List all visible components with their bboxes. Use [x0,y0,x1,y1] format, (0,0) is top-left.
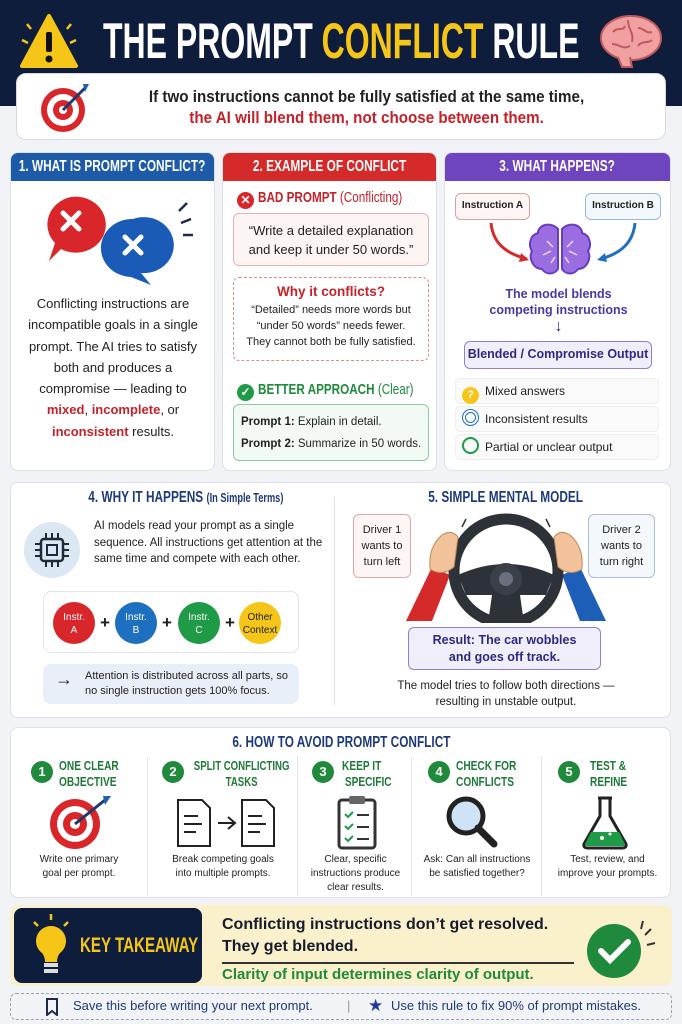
better approach label: BETTER APPROACH (Clear) [258,381,414,398]
step 3: clear results. [327,882,384,893]
attention note: Attention is distributed across all parts, so no single instruction gets 100% focus. [85,670,288,697]
text: model tries: resulting in unstable output. [436,696,576,708]
driver 2 box: turn right [600,556,643,568]
icon: speech bubbles [47,196,193,285]
subtitle text [149,88,585,127]
panel: 3 what happens [444,152,671,471]
text: why: AI models read your prompt as a single sequence. All instructions get attention at the same time and compete with each other. [94,520,322,565]
why it conflicts box: “under 50 words” needs fewer. [257,320,405,332]
step 4: Ask: Can all instructions [424,854,530,865]
icon: brain [600,15,662,68]
bad prompt quote box: “Write a detailed explanation [249,223,413,238]
driver 1 box: Driver 1 [363,524,401,536]
circles row: + [162,613,172,632]
step 2 [147,756,297,896]
footer dashed bar: | [347,998,350,1013]
result box: Result: The car wobbles [433,633,576,647]
header banner [0,0,682,106]
better approach label: ✓ [240,385,251,399]
step 1: OBJECTIVE [59,774,116,789]
step 2: into multiple prompts. [175,868,271,879]
instruction B box [585,193,661,220]
step 4: be satisfied together? [429,868,525,879]
heading 3: 3. WHAT HAPPENS? [500,158,615,175]
icon: check circle [587,920,656,978]
text: definition: Conflicting instructions are incompatible goals in a single prompt. The AI tries to satisfy both and produces a compromise — leading to mixed, incomplete, or inconsistent results. [28,296,198,439]
panel: 6 how to avoid [10,727,671,898]
icon: lightbulb [33,914,69,973]
panel: 4 and 5 [10,482,671,718]
subtitle text: If two instructions cannot be fully satisfied at the same time, [149,88,585,106]
instruction B box: Instruction B [592,200,654,211]
circles row [43,591,299,653]
circles row: Other [247,612,273,623]
circles row: Instr. [188,612,210,623]
list: outcomes: Mixed answers [485,384,565,398]
bad prompt quote box: and keep it under 50 words.” [249,242,413,257]
driver 2 box: Driver 2 [602,524,641,536]
step 3: SPECIFIC [345,774,392,789]
step 1 [31,758,119,879]
takeaway text: Conflicting instructions don’t get resolved. [222,916,548,933]
heading 6: 6. HOW TO AVOID PROMPT CONFLICT [232,734,451,751]
step 2: TASKS [226,774,258,789]
step 5: REFINE [590,774,627,789]
step 1: goal per prompt. [43,868,115,879]
heading 5: 5. SIMPLE MENTAL MODEL [429,489,583,506]
arrow down: ↓ [554,318,562,335]
text: model tries: The model tries to follow both directions — [397,680,615,692]
step 4 [411,756,541,896]
circles row: + [100,613,110,632]
icon: warning triangle [20,14,78,68]
why it conflicts box: “Detailed” needs more words but [251,304,411,316]
better prompt box: Prompt 2: Summarize in 50 words. [241,438,421,450]
heading 1: 1. WHAT IS PROMPT CONFLICT? [19,158,206,175]
output box [464,341,652,369]
attention note [43,664,299,704]
footer dashed bar [10,993,672,1020]
list: outcomes [455,378,659,460]
footer dashed bar: Use this rule to fix 90% of prompt mistakes. [391,998,641,1013]
subtitle card [16,73,666,140]
text: model blends [489,287,628,317]
step 5: improve your prompts. [558,868,657,879]
step 4: CHECK FOR [456,758,516,773]
step 1: 1 [38,764,46,779]
why it conflicts box [233,277,429,361]
step 5: Test, review, and [570,854,645,865]
heading 1 [0,153,364,181]
output box: Blended / Compromise Output [468,347,648,361]
icon: steering wheel with hands [406,514,606,623]
step 2: Break competing goals [172,854,274,865]
bad prompt quote box [233,213,429,266]
icon: brain with arrows [490,222,636,274]
icon: target [41,84,89,132]
text: model tries [397,680,615,708]
why it conflicts box: They cannot both be fully satisfied. [246,336,416,348]
key takeaway band: Clarity of input determines clarity of output. [222,966,534,983]
title: THE PROMPT CONFLICT RULE [103,13,579,69]
icon: bookmark [46,998,58,1016]
step 5 [541,756,672,896]
circles row: A [71,625,78,636]
driver 1 box: wants to [362,540,402,552]
step 3: Clear, specific [324,854,387,865]
panel: 1 what is prompt conflict [10,152,215,471]
list: outcomes: Partial or unclear output [485,440,612,454]
step 3 [297,756,412,896]
driver 2 box: wants to [601,540,642,552]
circles row: Instr. [125,612,147,623]
icon: chip [24,522,80,578]
step 3: 3 [319,764,327,779]
heading 4: 4. WHY IT HAPPENS (In Simple Terms) [88,489,284,506]
step 3: KEEP IT [342,758,381,773]
text: model blends: competing instructions [489,303,628,317]
bad prompt label: BAD PROMPT (Conflicting) [258,189,402,206]
circles row: C [195,625,203,636]
heading 3 [295,153,682,181]
subtitle text: the AI will blend them, not choose between them. [190,109,544,127]
takeaway text: They get blended. [222,938,358,955]
step 2: 2 [169,764,177,779]
step 1: Write one primary [40,854,118,865]
circles row: Instr. [63,612,85,623]
icon: star: ★ [368,996,383,1015]
better prompt box: Prompt 1: Explain in detail. [241,416,382,428]
footer dashed bar: Save this before writing your next prompt. [73,998,313,1013]
list: outcomes: Inconsistent results [485,412,588,426]
key takeaway label box: KEY TAKEAWAY [80,934,198,957]
result box: and goes off track. [449,650,560,664]
driver 2 box [588,514,655,578]
divider [334,497,335,705]
step 3: instructions produce [311,868,400,879]
why it conflicts box: Why it conflicts? [277,284,385,299]
attention note: → [55,669,73,689]
bad prompt label: ✕ [240,193,251,207]
heading 2 [73,153,586,181]
step 5: 5 [565,764,573,779]
text: model blends: The model blends [505,287,612,301]
circles row: + [225,613,235,632]
step 2: SPLIT CONFLICTING [194,758,290,773]
circles row: B [133,625,140,636]
step 5: TEST & [590,758,626,773]
list: outcomes: ? [467,389,474,401]
key takeaway band [10,905,672,986]
result box [408,627,601,670]
key takeaway label box [14,908,202,983]
step 4: CONFLICTS [456,774,514,789]
better prompt box [233,404,429,461]
circles row: Context [243,625,277,636]
instruction A box: Instruction A [462,200,523,211]
step 4: 4 [435,764,443,779]
heading 2: 2. EXAMPLE OF CONFLICT [253,158,406,175]
driver 1 box: turn left [364,556,400,568]
driver 1 box [353,514,411,578]
step 1: ONE CLEAR [59,758,119,773]
instruction A box [455,193,530,220]
takeaway text [222,916,548,955]
panel: 2 example of conflict [222,152,437,471]
